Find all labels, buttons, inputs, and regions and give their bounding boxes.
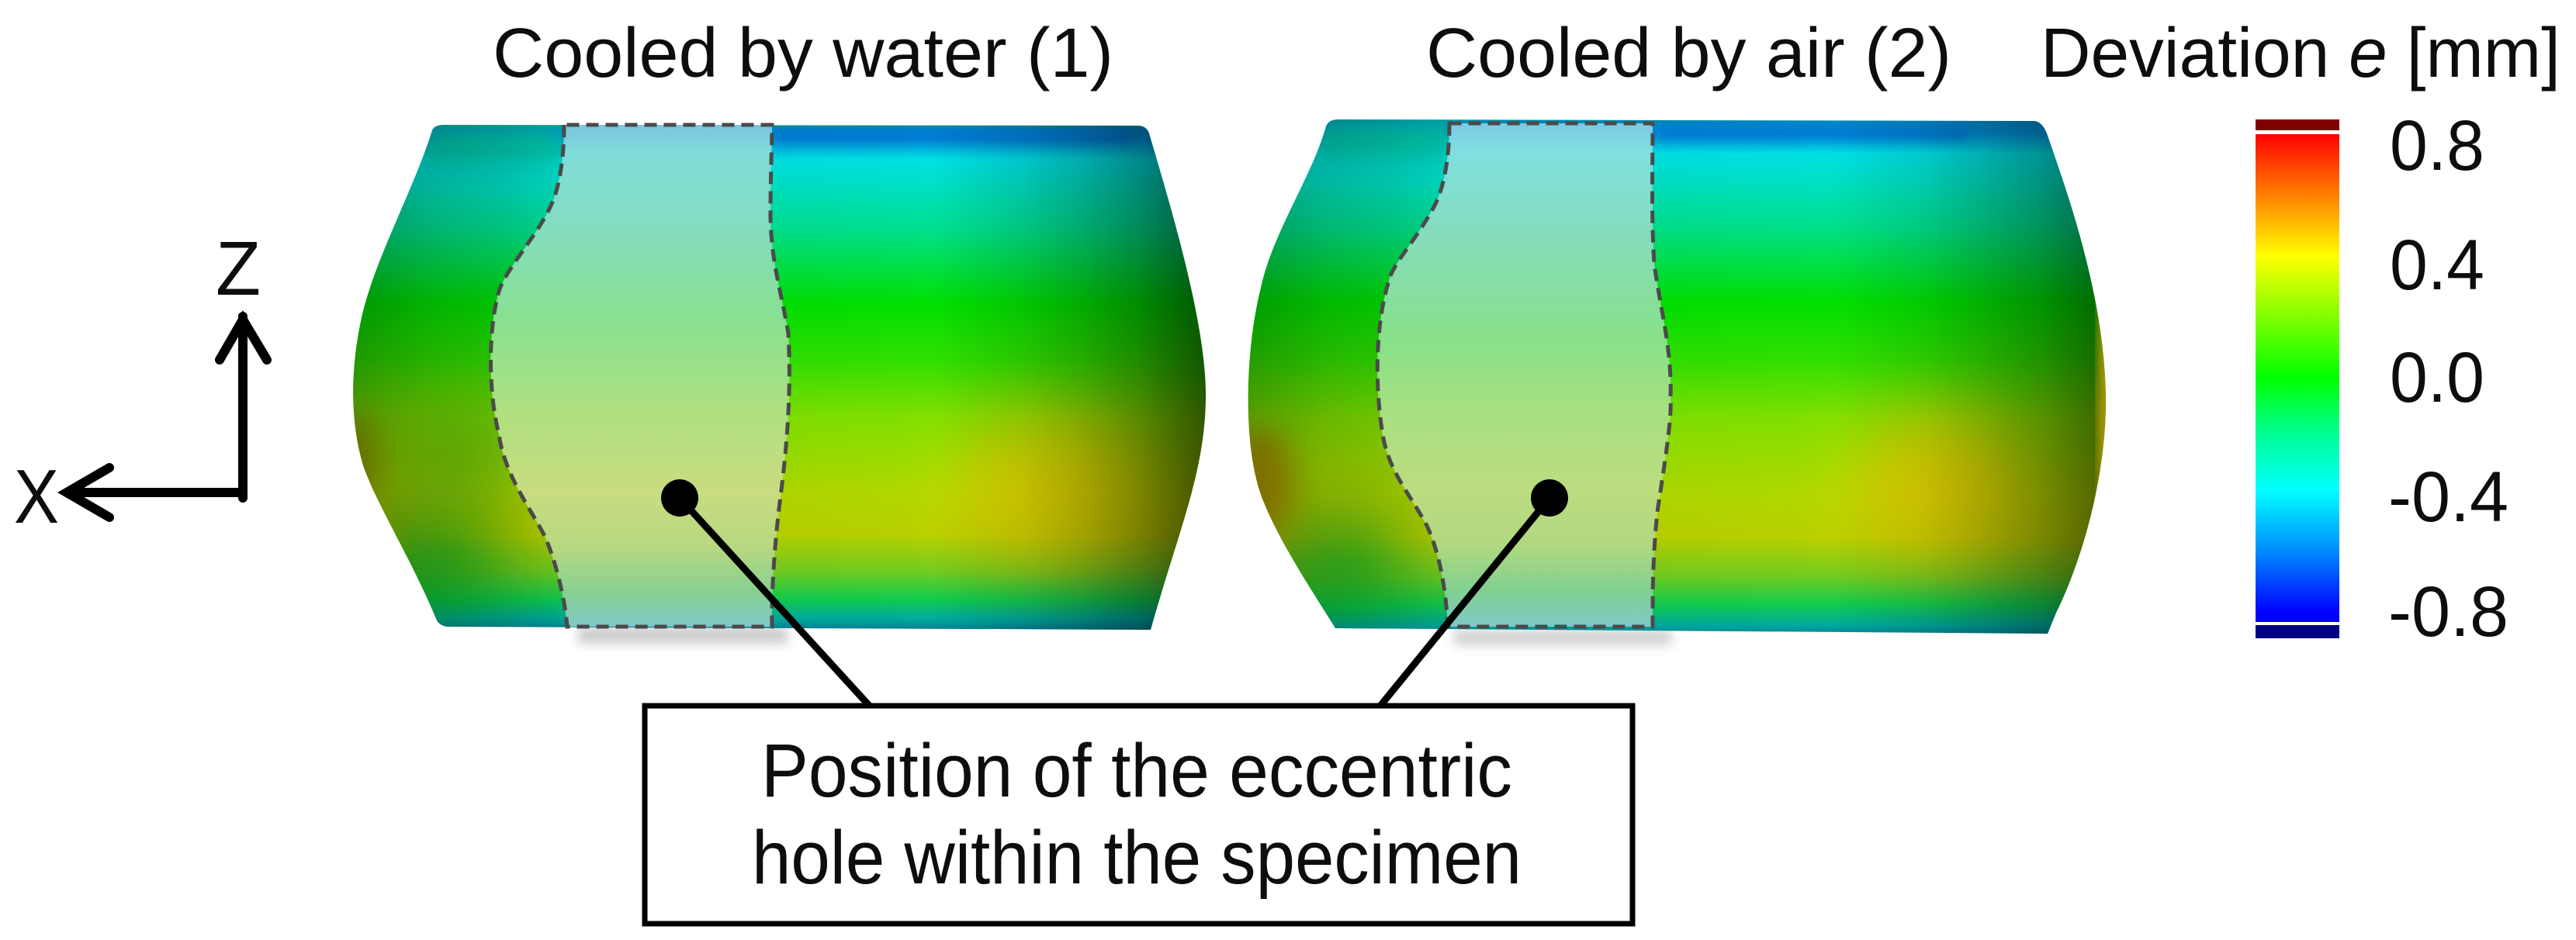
leader line: specimen 1 hole to callout bbox=[661, 479, 873, 710]
shadow below hole region bbox=[578, 627, 788, 644]
arrow: Z axis bbox=[220, 316, 267, 498]
axes: X and Z coordinate arrows bbox=[14, 226, 267, 539]
callout: position of the eccentric hole bbox=[645, 706, 1633, 924]
shadow below hole region bbox=[1454, 630, 1671, 645]
tick label 0.4: 0.4 bbox=[2390, 226, 2484, 305]
label: X: X bbox=[14, 454, 59, 539]
callout: position of the eccentric hole: hole within the specimen bbox=[752, 815, 1522, 900]
deviation map bbox=[340, 124, 1210, 630]
heading: cooled by air: Cooled by air (2) bbox=[1426, 15, 1951, 92]
specimen 2: cooled by air bbox=[1228, 118, 2114, 645]
heading: deviation legend title: Deviation e [mm] bbox=[2041, 15, 2560, 92]
specimen 1: cooled by water bbox=[340, 124, 1210, 644]
tick label 0.8: 0.8 bbox=[2390, 106, 2484, 185]
colour gradient bar bbox=[2256, 134, 2339, 622]
leader line: specimen 2 hole to callout bbox=[1377, 479, 1568, 710]
label: Z: Z bbox=[216, 226, 261, 311]
callout: position of the eccentric hole: Position of the eccentric bbox=[761, 728, 1512, 813]
bottom overflow swatch bbox=[2256, 625, 2339, 638]
tick label -0.8: -0.8 bbox=[2388, 572, 2508, 651]
tick label -0.4: -0.4 bbox=[2388, 458, 2508, 537]
heading: cooled by water: Cooled by water (1) bbox=[493, 15, 1113, 92]
top overflow swatch bbox=[2256, 119, 2339, 130]
arrow: X axis bbox=[67, 468, 243, 517]
tick label 0.0: 0.0 bbox=[2390, 338, 2484, 417]
highlighted hole region bbox=[1377, 123, 1671, 627]
deviation map bbox=[1228, 118, 2114, 636]
colour scale legend bbox=[2256, 106, 2508, 651]
highlighted hole region bbox=[490, 125, 789, 627]
